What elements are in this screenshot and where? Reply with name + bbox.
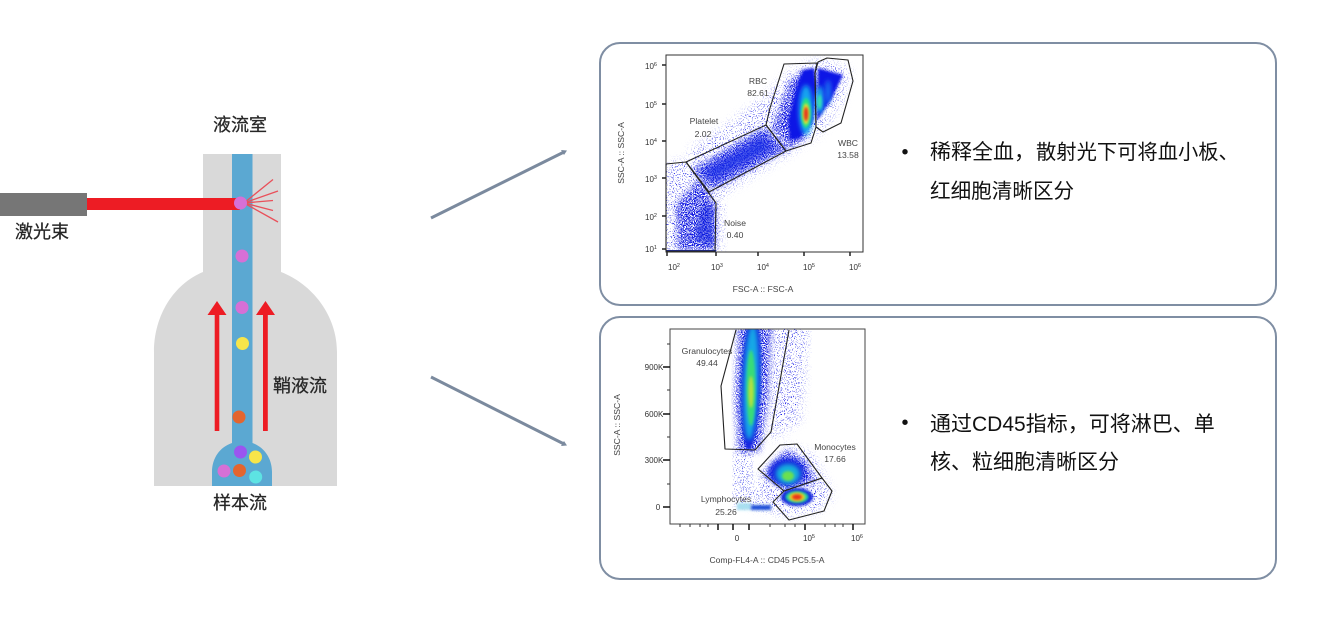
label: Lymphocytes: Lymphocytes [701, 494, 751, 504]
y tick labels: 900K [645, 363, 664, 372]
description text: • [902, 142, 909, 164]
label: Lymphocytes [701, 494, 751, 517]
x tick labels: 4 [766, 263, 769, 269]
x tick labels: 2 [677, 263, 680, 269]
sheath chamber body [154, 154, 337, 486]
gate: RBC [766, 63, 817, 151]
x tick labels: 0 [735, 534, 740, 543]
gate: Lymphocytes [773, 478, 832, 520]
label: Monocytes [814, 442, 856, 464]
gate: Granulocytes [721, 330, 789, 450]
density cloud [664, 60, 850, 254]
label: Lymphocytes: 25.26 [715, 507, 737, 517]
description text: 稀释全血， [930, 141, 1035, 164]
gate: Noise [666, 162, 716, 251]
gate: WBC [815, 58, 853, 132]
y tick labels: 10 [645, 101, 654, 110]
x axis title: Comp-FL4-A :: CD45 PC5.5-A [709, 555, 825, 565]
x tick labels: 10 [803, 534, 812, 543]
x tick labels: 6 [858, 263, 861, 269]
panel frame [600, 43, 1276, 305]
label: Noise [724, 218, 746, 240]
gate: Monocytes [758, 444, 822, 491]
cells in stream [218, 196, 262, 484]
y tick labels [645, 363, 664, 512]
label: laser beam: 激光束 [15, 222, 69, 242]
y tick labels [645, 62, 657, 254]
x tick labels: 10 [757, 263, 766, 272]
label: Platelet [690, 116, 719, 139]
description text: 核、粒细胞清晰区分 [930, 451, 1119, 474]
density cloud [734, 314, 832, 516]
y tick labels: 4 [654, 138, 657, 144]
x tick labels: 5 [812, 534, 815, 540]
panel frame [600, 317, 1276, 579]
label: Granulocytes [682, 346, 732, 368]
axis ticks [663, 367, 853, 530]
x tick labels: 6 [860, 534, 863, 540]
label: WBC [837, 138, 859, 160]
x tick labels [735, 534, 863, 543]
x tick labels [668, 263, 861, 272]
x tick labels: 10 [668, 263, 677, 272]
panel: scatter light [600, 43, 1276, 305]
y tick labels: 6 [654, 62, 657, 68]
axes frame [670, 329, 865, 524]
description text: • [902, 412, 909, 434]
axis ticks [662, 65, 850, 256]
description text [902, 141, 1239, 203]
x tick labels: 10 [803, 263, 812, 272]
label: Platelet: Platelet [690, 116, 719, 126]
FSC vs SSC scatter plot [616, 55, 863, 294]
gate: Platelet [686, 125, 786, 192]
description text: 红细胞清晰区分 [930, 180, 1074, 203]
x tick labels: 10 [849, 263, 858, 272]
label: Platelet: 2.02 [695, 129, 712, 139]
description text: 散射光下可将血小板、 [1036, 141, 1239, 164]
x tick labels: 10 [711, 263, 720, 272]
sample stream channel [212, 154, 272, 486]
y tick labels: 10 [645, 175, 654, 184]
y tick labels: 10 [645, 138, 654, 147]
label: RBC [747, 76, 769, 98]
label: sample flow: 样本流 [213, 493, 267, 513]
x tick labels: 5 [812, 263, 815, 269]
flow chamber diagram [0, 154, 337, 486]
label: Noise: 0.40 [727, 230, 744, 240]
y tick labels: 600K [645, 410, 664, 419]
y tick labels: 300K [645, 456, 664, 465]
axes frame [666, 55, 863, 252]
CD45 vs SSC scatter plot [612, 314, 865, 565]
laser source [0, 193, 87, 216]
label: sheath flow: 鞘液流 [273, 376, 327, 396]
y tick labels: 1 [654, 245, 657, 251]
y tick labels: 10 [645, 213, 654, 222]
y tick labels: 2 [654, 213, 657, 219]
laser beam [87, 198, 240, 210]
label: Monocytes: 17.66 [824, 454, 846, 464]
y axis title: SSC-A :: SSC-A [616, 122, 626, 184]
label: flow chamber: 液流室 [213, 115, 267, 135]
scattered light rays [244, 180, 278, 222]
y tick labels: 10 [645, 62, 654, 71]
y tick labels: 5 [654, 101, 657, 107]
arrow to bottom panel [431, 377, 567, 446]
x axis title: FSC-A :: FSC-A [733, 284, 794, 294]
y tick labels: 10 [645, 245, 654, 254]
label: RBC: 82.61 [747, 88, 769, 98]
description text [902, 412, 1215, 474]
label: WBC: 13.58 [837, 150, 859, 160]
sheath flow arrow left [208, 301, 226, 431]
label: RBC: RBC [749, 76, 767, 86]
y tick labels: 0 [656, 503, 661, 512]
x tick labels: 10 [851, 534, 860, 543]
label: Granulocytes: Granulocytes [682, 346, 732, 356]
arrow to top panel [431, 150, 567, 218]
label: WBC: WBC [838, 138, 858, 148]
description text: 通过CD45指标，可将淋巴、单 [930, 413, 1215, 436]
sheath flow arrow right [256, 301, 275, 431]
label: Noise: Noise [724, 218, 746, 228]
y tick labels: 3 [654, 175, 657, 181]
label: Granulocytes: 49.44 [696, 358, 718, 368]
label: Monocytes: Monocytes [814, 442, 856, 452]
y axis title: SSC-A :: SSC-A [612, 394, 622, 456]
x tick labels: 3 [720, 263, 723, 269]
panel: CD45 gating [600, 314, 1276, 579]
